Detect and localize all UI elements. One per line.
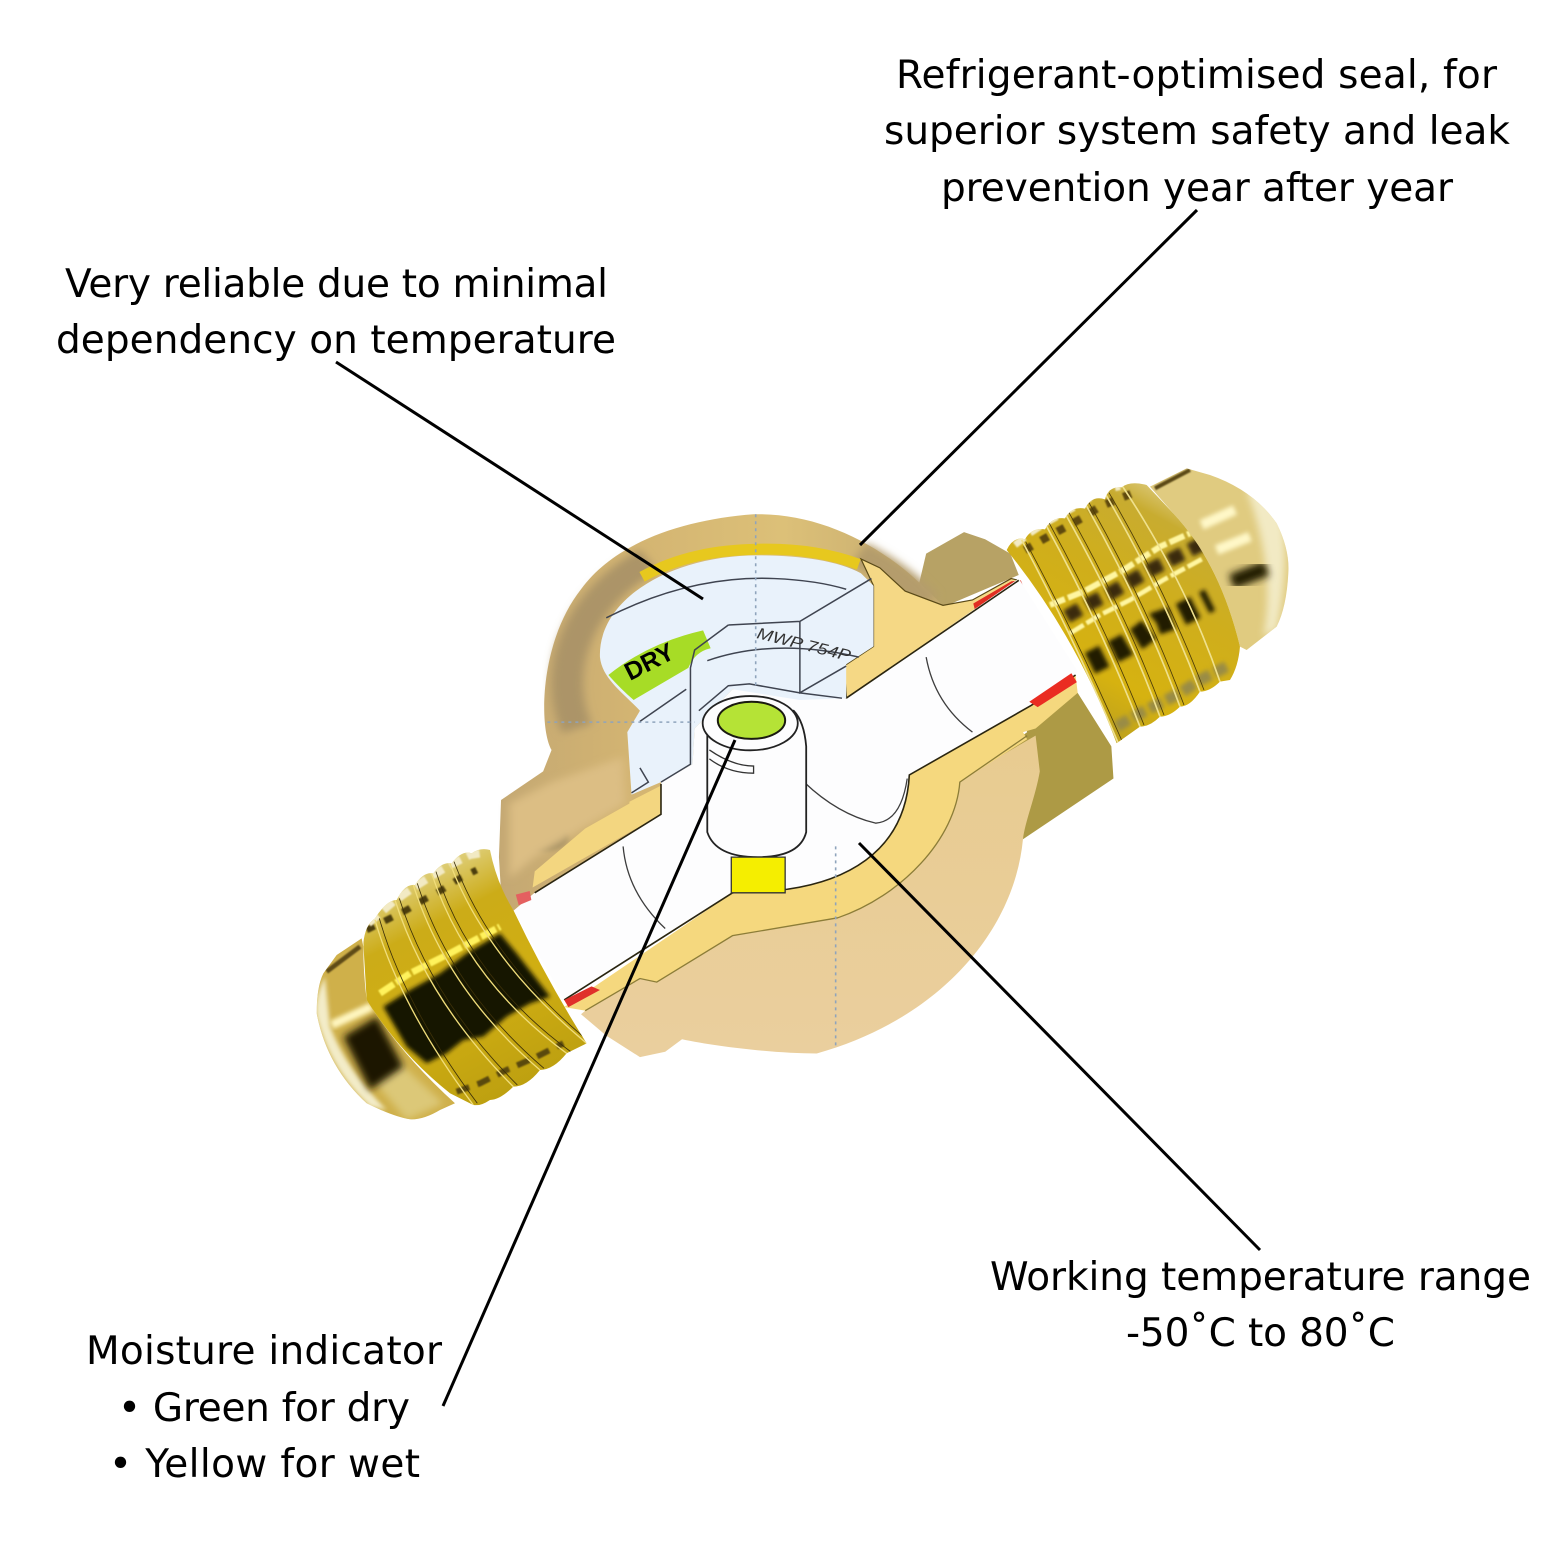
ring shaded band left — [567, 561, 648, 729]
cast body lower bowl — [581, 736, 1040, 1057]
red seal upper right — [973, 580, 1023, 614]
left collar — [316, 938, 455, 1120]
leader line: working temperature — [859, 843, 1260, 1250]
valve body and cutaway section — [499, 514, 1113, 1057]
yellow ring band — [642, 549, 859, 577]
leader line: temperature dependency — [336, 362, 703, 599]
tube coil — [709, 750, 754, 773]
flange shadow hole — [522, 824, 568, 851]
callout: refrigerant seal: prevention year after year — [941, 166, 1454, 211]
callout: reliability: Very reliable due to minimal — [65, 262, 608, 307]
upper flange block — [918, 532, 1019, 607]
upper right cut section — [844, 559, 1019, 698]
callout: refrigerant seal: Refrigerant-optimised seal, for — [896, 53, 1498, 98]
dry indicator band — [608, 630, 711, 700]
upper left cut section — [533, 786, 661, 887]
sight glass cutaway illustration — [310, 460, 1300, 1127]
red seal lower right — [1029, 673, 1077, 707]
MWP label: MWP 754P — [755, 625, 853, 665]
callout: refrigerant seal — [884, 53, 1510, 211]
callout: moisture indicator: Moisture indicator — [86, 1329, 443, 1374]
right threaded end — [1006, 468, 1288, 744]
fluid channel — [514, 579, 1078, 1000]
indicator tube — [707, 711, 806, 857]
lower cut section — [564, 675, 1078, 1011]
right collar — [1150, 468, 1288, 650]
tube top ring — [703, 696, 798, 750]
yellow block — [731, 857, 785, 893]
sight glass ring — [499, 514, 972, 911]
callout: reliability — [56, 262, 616, 363]
red seal lower left — [564, 986, 600, 1007]
callout: moisture indicator — [86, 1329, 443, 1487]
left flange lighter casting — [509, 757, 625, 879]
body arcs — [623, 657, 972, 929]
leader line: seal — [860, 210, 1197, 545]
DRY label: DRY — [620, 638, 679, 686]
channel upper edges — [535, 580, 1019, 893]
callout: reliability: dependency on temperature — [56, 318, 616, 363]
callout: moisture indicator: • Green for dry — [118, 1386, 410, 1431]
callout: refrigerant seal: superior system safety and leak — [884, 109, 1510, 154]
channel lower edge — [564, 675, 1076, 1000]
moisture indicator green dot — [718, 702, 785, 739]
section lower outline — [585, 736, 1027, 1011]
callout: working temperature: -50˚C to 80˚C — [1126, 1311, 1395, 1356]
sight window — [600, 555, 874, 795]
right threads — [1006, 483, 1240, 744]
callout: working temperature — [990, 1255, 1531, 1356]
cast body rear flange — [956, 693, 1113, 843]
callout: working temperature: Working temperature range — [990, 1255, 1531, 1300]
red seal upper left — [516, 891, 531, 905]
inner box linework — [606, 578, 871, 793]
callout: moisture indicator: • Yellow for wet — [109, 1442, 420, 1487]
leader line: moisture indicator — [443, 740, 735, 1406]
left threaded end — [310, 847, 593, 1127]
ring shaded band right — [859, 554, 926, 604]
left threads — [357, 847, 593, 1113]
dotted centre lines — [547, 514, 836, 1046]
